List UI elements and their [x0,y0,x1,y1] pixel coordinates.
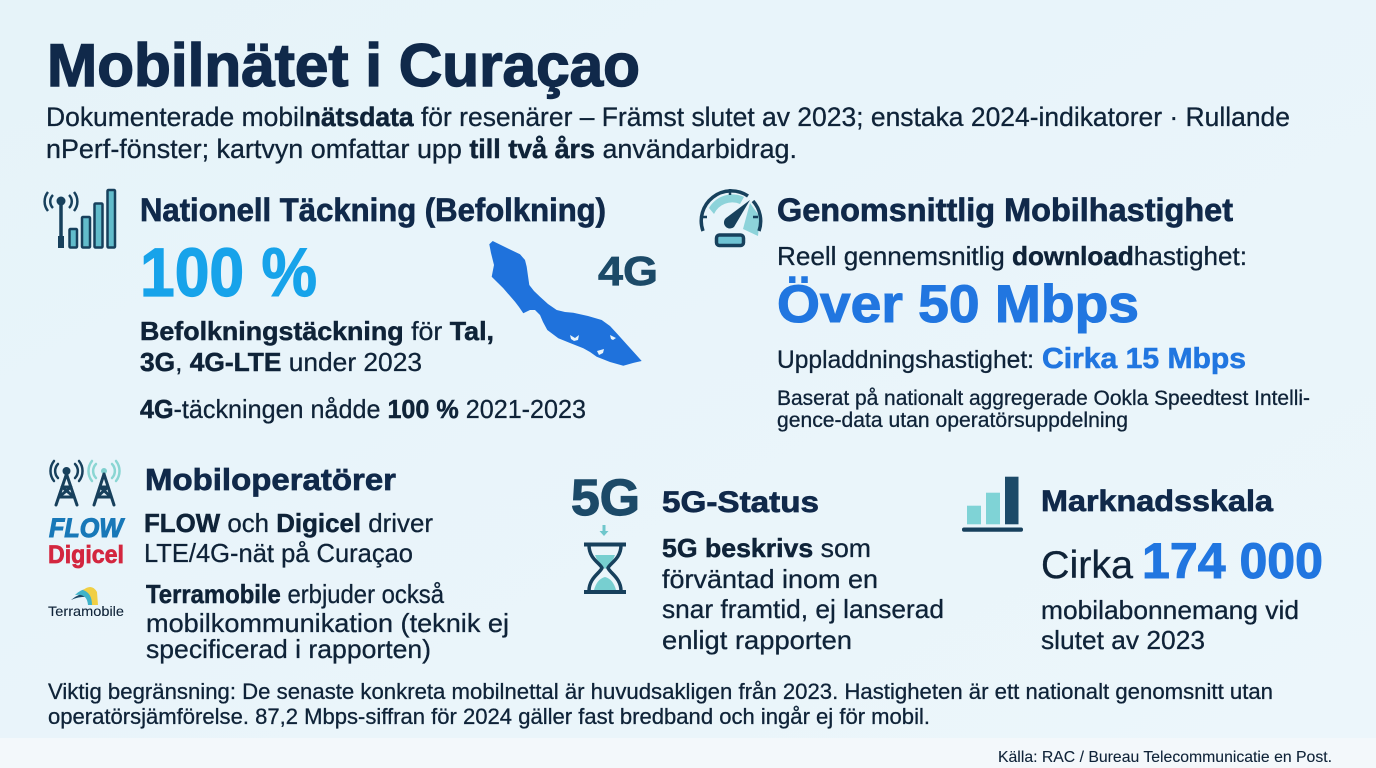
operators text: FLOW and Digicel: FLOW och Digicel driver [144,508,433,538]
icon: antenna with signal bars [45,190,115,248]
source note: Ookla [777,387,1310,432]
logo: FLOW: FLOW [49,513,125,543]
panel: national coverage [45,190,658,424]
upload speed: Uppladdningshastighet: [777,346,1034,374]
big number: download speed: Över 50 Mbps [777,275,1139,334]
heading: 5G status: 5G-Status [662,486,819,519]
subtitle [46,102,1290,164]
upload speed [777,343,1246,375]
logo: Digicel: Digicel [48,541,124,569]
operators text: FLOW and Digicel: LTE/4G-nät på Curaçao [144,538,413,568]
source line: Källa: RAC / Bureau Telecommunicatie en Post. [998,749,1332,766]
source note: Ookla: Baserat på nationalt aggregerade Ookla Speedtest Intelli- [777,387,1310,410]
subscriptions figure: Cirka [1041,544,1133,587]
5G text: snar framtid, ej lanserad [662,594,944,624]
icon: hourglass [584,544,626,592]
icon: bar chart [962,477,1023,532]
logo: Terramobile: Terramobile [48,603,124,619]
callout: important limitation: operatörsjämförelse. 87,2 Mbps-siffran för 2024 gäller fast bredband och ingår ej för mobil. [48,704,930,729]
operators text: Terramobile: specificerad i rapporten) [146,634,431,664]
operators text: Terramobile: mobilkommunikation (teknik ej [146,608,509,638]
label: 4G: 4G [598,248,658,294]
5G text: 5G beskrivs som [662,533,871,563]
callout: important limitation [48,679,1273,729]
logo: Terramobile [48,587,124,619]
icon: speedometer [701,189,761,246]
icon: down arrow [600,525,608,536]
5G text [662,533,944,655]
upload speed: Cirka 15 Mbps [1042,343,1246,375]
coverage text: Befolkningstäckning för Tal, [140,316,494,346]
icon: two radio towers [50,461,120,505]
source note: Ookla: gence-data utan operatörsuppdelning [777,409,1128,432]
heading: operators: Mobiloperatörer [145,462,396,497]
panel: 5G status [571,469,944,655]
subscriptions figure [1041,533,1323,589]
operators text: Terramobile [146,579,509,664]
panel: market scale [962,477,1323,655]
subscriptions figure: 174 000 [1142,533,1323,589]
map: Curaçao [489,241,642,366]
heading: national coverage: Nationell Täckning (Befolkning) [140,192,606,228]
5G text: enligt rapporten [662,625,852,655]
subtitle: nPerf-fönster; kartvyn omfattar upp till två års användarbidrag. [46,134,797,164]
label: 5G: 5G [571,469,640,526]
subtitle: Dokumenterade mobilnätsdata för resenärer – Främst slutet av 2023; enstaka 2024-indikatorer · Rullande [46,102,1290,132]
5G text: förväntad inom en [662,564,878,594]
operators text: Terramobile: Terramobile erbjuder också [146,579,444,609]
callout: important limitation: Viktig begränsning: De senaste konkreta mobilnettal är huvudsakligen från 2023. Hastigheten är ett nationalt genomsnitt utan [48,679,1273,704]
subscriptions caption: slutet av 2023 [1041,625,1205,655]
panel: average mobile speed [701,189,1310,432]
operators text: FLOW and Digicel [144,508,433,568]
coverage text: 3G, 4G-LTE under 2023 [140,347,422,377]
subscriptions caption: mobilabonnemang vid [1041,595,1299,625]
coverage text [140,316,586,424]
download label: Reell gennemsnitlig downloadhastighet: [777,241,1247,271]
subscriptions caption [1041,595,1299,655]
heading: market scale: Marknadsskala [1041,485,1273,518]
big number: 100 %: 100 % [140,234,317,311]
title: Mobilnätet i Curaçao [47,32,640,99]
coverage text: 4G-täckningen nådde 100 % 2021-2023 [140,394,586,424]
panel: mobile operators [48,461,509,664]
heading: average mobile speed: Genomsnittlig Mobilhastighet [777,192,1233,228]
